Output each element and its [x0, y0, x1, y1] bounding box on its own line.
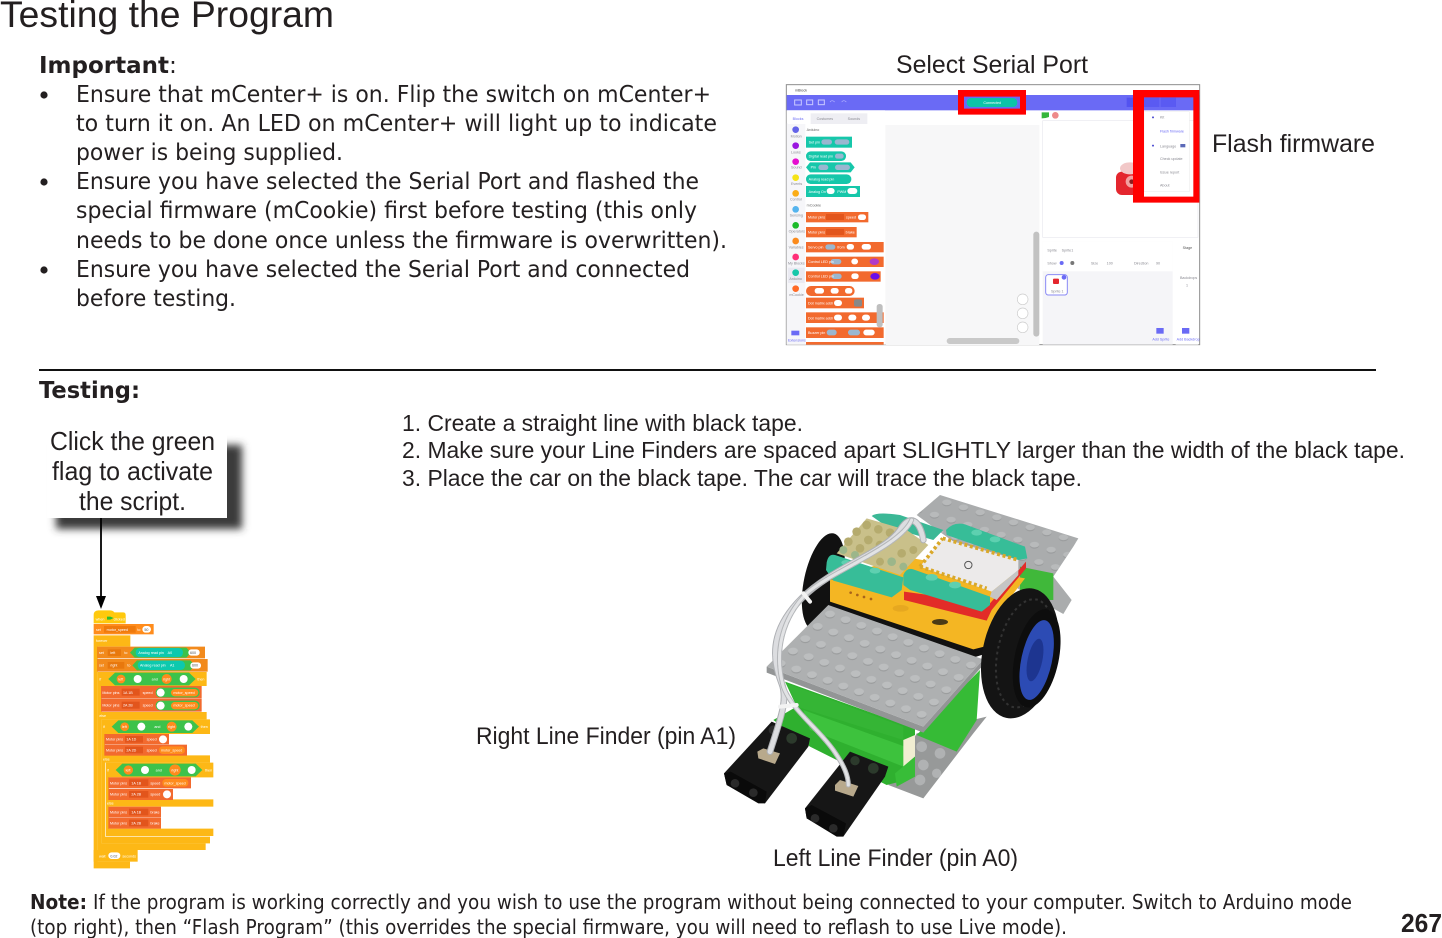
block script: 1A 1D — [126, 738, 137, 742]
step 3: 3. Place the car on the black tape. The car will trace the black tape. — [402, 465, 1082, 491]
block script — [94, 610, 213, 868]
callout shadow — [56, 445, 242, 529]
bullet 1 line 3: power is being supplied. — [76, 138, 343, 166]
screenshot: mBlock interface: from — [837, 245, 845, 249]
block script: else — [103, 758, 110, 762]
block script: forever — [96, 639, 108, 643]
block script: left — [118, 677, 123, 681]
block script: Motor pins — [102, 691, 120, 695]
screenshot: mBlock interface: Motor pins — [808, 231, 825, 235]
text block: important — [39, 51, 727, 312]
screenshot: mBlock interface: PWM — [837, 190, 846, 194]
block script: and — [152, 677, 158, 681]
block script: motor_speed — [173, 704, 195, 708]
block script: speed — [150, 793, 160, 797]
step 1: 1. Create a straight line with black tape. — [402, 410, 803, 436]
block script: to — [127, 664, 130, 668]
block script: then — [201, 725, 208, 729]
block script: 50 — [144, 628, 148, 632]
bullet 1 line 1: Ensure that mCenter+ is on. Flip the switch on mCenter+ — [76, 80, 711, 108]
label: right line finder: Right Line Finder (pin A1) — [476, 723, 736, 750]
screenshot: mBlock interface: Sprite1 — [1062, 248, 1073, 252]
red strip — [904, 562, 1026, 621]
screenshot: mBlock interface: Arduino — [807, 128, 819, 132]
block script: then — [205, 768, 212, 772]
block script: set — [99, 651, 104, 655]
black strip — [830, 602, 987, 658]
screenshot: mBlock interface: About — [1160, 184, 1170, 188]
screenshot: mBlock interface: Costumes — [817, 117, 833, 121]
teal back block — [872, 514, 943, 540]
wifi module — [920, 538, 1018, 592]
if block 3 — [106, 763, 213, 836]
screenshot: mBlock interface: Events — [791, 182, 802, 186]
label: left line finder: Left Line Finder (pin A0) — [773, 845, 1018, 872]
wait block — [94, 850, 138, 862]
screenshot: mBlock interface: Sounds — [848, 117, 860, 121]
screenshot: mBlock interface: Add Sprite — [1152, 337, 1169, 341]
block script: speed — [150, 781, 160, 785]
screenshot: mBlock interface: 90 — [1156, 262, 1160, 266]
block script: 2A 2B — [131, 793, 142, 797]
divider line — [39, 369, 1376, 371]
screenshot: mBlock interface: Pin — [811, 166, 816, 170]
block script: motor_speed — [164, 781, 186, 785]
block script: 0.02 — [110, 854, 117, 858]
screenshot: mBlock interface: Set pin — [809, 141, 820, 145]
front plate — [767, 659, 983, 733]
block script: Motor pins — [110, 781, 127, 785]
green chassis — [773, 682, 915, 785]
bullet 1 — [40, 91, 48, 99]
motor blocks 1 — [101, 686, 202, 699]
block script: 2A 2D — [126, 749, 137, 753]
bullet 3 line 1: Ensure you have selected the Serial Port and connected — [76, 255, 690, 283]
block script: left — [110, 651, 115, 655]
block script: A1 — [170, 664, 174, 668]
block script: motor_speed — [173, 691, 195, 695]
back green body — [1020, 567, 1053, 600]
block script: seconds — [122, 854, 136, 858]
lower plate — [888, 717, 987, 798]
block script: 2A 2B — [123, 704, 133, 708]
screenshot: mBlock interface: Operators — [789, 230, 805, 234]
screenshot: mBlock interface — [786, 85, 1200, 345]
teal left block — [826, 555, 903, 597]
screenshot: mBlock interface: Motion — [791, 134, 802, 138]
bullet 2 line 3: needs to be done once unless the firmware is overwritten). — [76, 226, 727, 254]
screenshot: mBlock interface: Blocks — [793, 117, 804, 121]
screenshot: mBlock interface: Control LED pin — [808, 275, 834, 279]
block script: if — [107, 768, 110, 772]
block script: right — [110, 664, 117, 668]
screenshot: mBlock interface: Kit — [1160, 116, 1164, 120]
screenshot: mBlock interface: 100 — [1107, 262, 1113, 266]
step 2: 2. Make sure your Line Finders are spaced apart SLIGHTLY larger than the width of the black tape. — [402, 437, 1405, 463]
set right — [97, 659, 208, 672]
back wheel — [794, 529, 852, 634]
screenshot: mBlock interface: Variables — [789, 246, 804, 250]
block script: brake — [150, 822, 159, 826]
screenshot: mBlock interface: mCookie — [789, 293, 804, 297]
screenshot: mBlock interface: Direction — [1134, 262, 1148, 266]
yellow battery body — [830, 557, 1025, 653]
block script: 1A 1B — [123, 691, 133, 695]
block script: to — [124, 651, 127, 655]
label: select serial port: Select Serial Port — [896, 51, 1088, 79]
screenshot: mBlock interface: Connected — [983, 101, 1001, 105]
block script: motor_speed — [107, 628, 128, 632]
block script: else — [99, 714, 106, 718]
screenshot: mBlock interface: Looks — [791, 150, 801, 154]
screenshot: mBlock interface: Language — [1160, 144, 1176, 148]
screenshot: mBlock interface: Add Backdrop — [1177, 337, 1200, 341]
heading colon: : — [169, 51, 177, 79]
screenshot: mBlock interface: Show — [1047, 262, 1057, 266]
bullet 3 — [40, 266, 48, 274]
sensor right — [805, 752, 888, 837]
arrow: callout to script — [96, 518, 106, 609]
block script: brake — [150, 810, 159, 814]
screenshot: mBlock interface: Size — [1091, 262, 1098, 266]
if block 2 — [102, 719, 210, 843]
connectors — [757, 748, 780, 764]
block script: Motor pins — [110, 822, 127, 826]
screenshot: mBlock interface: Arduino — [789, 277, 802, 281]
block script: set — [99, 664, 104, 668]
block script: Motor pins — [110, 810, 127, 814]
screenshot: mBlock interface: speed — [846, 216, 856, 220]
screenshot: mBlock interface: Motor pins — [808, 216, 825, 220]
teal right block back — [946, 524, 1027, 560]
screenshot: mBlock interface: Backdrops — [1180, 276, 1197, 280]
callout line 1: Click the green — [50, 426, 215, 456]
bullet 3 line 2: before testing. — [76, 284, 236, 312]
set motor_speed — [94, 624, 154, 634]
callout box — [47, 431, 227, 518]
forever loop — [94, 635, 130, 868]
callout line 3: the script. — [79, 486, 186, 516]
bullet 2 line 2: special firmware (mCookie) first before testing (this only — [76, 196, 697, 224]
screenshot: mBlock interface: Analog On — [809, 190, 826, 194]
block script: clicked — [114, 618, 125, 622]
block script: Motor pins — [106, 749, 123, 753]
block script: set — [96, 628, 101, 632]
note label: Note: — [30, 890, 87, 914]
block script: Analog read pin — [138, 651, 164, 655]
block script: 1A 1B — [131, 810, 142, 814]
teal right block front — [903, 569, 990, 612]
if block 1 — [98, 672, 207, 850]
block script: if — [103, 725, 106, 729]
red box: serial port — [958, 90, 1026, 115]
screenshot: mBlock interface: mBlock — [795, 88, 807, 92]
block script: else — [107, 801, 114, 805]
back plate — [917, 495, 1078, 614]
block script: right — [163, 677, 170, 681]
screenshot: mBlock interface: Flash firmware — [1160, 129, 1184, 133]
red box: flash firmware — [1133, 90, 1199, 203]
usb ports — [932, 619, 948, 625]
motor blocks brake — [108, 807, 161, 817]
block script: to — [137, 628, 140, 632]
sensor board cream — [837, 518, 928, 575]
block script: speed — [143, 691, 153, 695]
bullet 1 line 2: to turn it on. An LED on mCenter+ will light up to indicate — [76, 109, 717, 137]
note line 1: If the program is working correctly and you wish to use the program without being connected to your computer. Switch to Arduino mode — [93, 890, 1352, 914]
bullet 2 — [40, 178, 48, 186]
block script: if — [99, 677, 102, 681]
block script: speed — [147, 738, 157, 742]
block script: Analog read pin — [140, 664, 166, 668]
block script: motor_speed — [161, 749, 182, 753]
block script: Motor pins — [110, 793, 127, 797]
callout: click the green flag — [47, 426, 242, 529]
block script: then — [197, 677, 204, 681]
block script: when — [96, 618, 104, 622]
block script: right — [171, 768, 178, 772]
screenshot: mBlock interface: My Blocks — [788, 261, 805, 265]
screenshot: mBlock interface: mCookie — [807, 203, 821, 207]
screenshot: mBlock interface: brake — [846, 231, 855, 235]
sensor left — [724, 722, 810, 803]
note — [30, 890, 1352, 938]
screenshot: mBlock interface: Digital read pin — [809, 155, 833, 159]
heading: testing: Testing: — [39, 376, 140, 404]
wires — [770, 520, 923, 785]
motor blocks 3 — [108, 777, 191, 788]
screenshot: mBlock interface: 1 — [1186, 283, 1188, 287]
block script: 2A 2B — [131, 822, 142, 826]
screenshot: mBlock interface: Sprite — [1047, 248, 1057, 252]
screenshot: mBlock interface: Extensions — [788, 339, 806, 343]
block script: Motor pins — [106, 738, 123, 742]
screenshot: mBlock interface: Check update — [1160, 157, 1183, 161]
screenshot: mBlock interface: Dot matrix addr — [808, 316, 834, 320]
set left — [97, 647, 205, 658]
screenshot: mBlock interface: Sprite 1 — [1051, 290, 1064, 294]
block script: and — [156, 768, 162, 772]
screenshot: mBlock interface: Analog read pin — [809, 178, 834, 182]
screenshot: mBlock interface: Servo pin — [808, 245, 823, 249]
block script: 600 — [190, 651, 196, 655]
block script: right — [168, 725, 175, 729]
block script: Motor pins — [102, 704, 120, 708]
block script: 600 — [192, 664, 198, 668]
screenshot: mBlock interface: Control — [790, 198, 802, 202]
bullet 2 line 1: Ensure you have selected the Serial Port and flashed the — [76, 167, 699, 195]
screenshot: mBlock interface: Stage — [1183, 246, 1192, 250]
motor blocks 2 — [104, 734, 169, 744]
steps list — [402, 410, 1405, 491]
screenshot: mBlock interface: Sensing — [790, 214, 803, 218]
block script: A0 — [168, 651, 172, 655]
block script: 1A 1B — [131, 781, 142, 785]
screenshot: mBlock interface: Dot matrix addr — [808, 302, 834, 306]
screenshot: mBlock interface: Sound — [791, 166, 802, 170]
screenshot: mBlock interface: Issue report — [1160, 170, 1179, 174]
screenshot: mBlock interface: Buzzer pin — [808, 331, 825, 335]
hat block — [94, 610, 126, 623]
screenshot: mBlock interface: Control LED pin — [808, 260, 834, 264]
block script: left — [122, 725, 127, 729]
label: flash firmware: Flash firmware — [1212, 130, 1375, 158]
block script: left — [126, 768, 131, 772]
heading: important: Important — [39, 51, 169, 79]
front wheel — [970, 581, 1070, 726]
block script: wait — [99, 854, 106, 858]
block script: and — [154, 725, 160, 729]
block script: speed — [143, 704, 153, 708]
callout line 2: flag to activate — [52, 456, 213, 486]
block script: speed — [147, 749, 157, 753]
illustration: line following car — [724, 495, 1078, 837]
